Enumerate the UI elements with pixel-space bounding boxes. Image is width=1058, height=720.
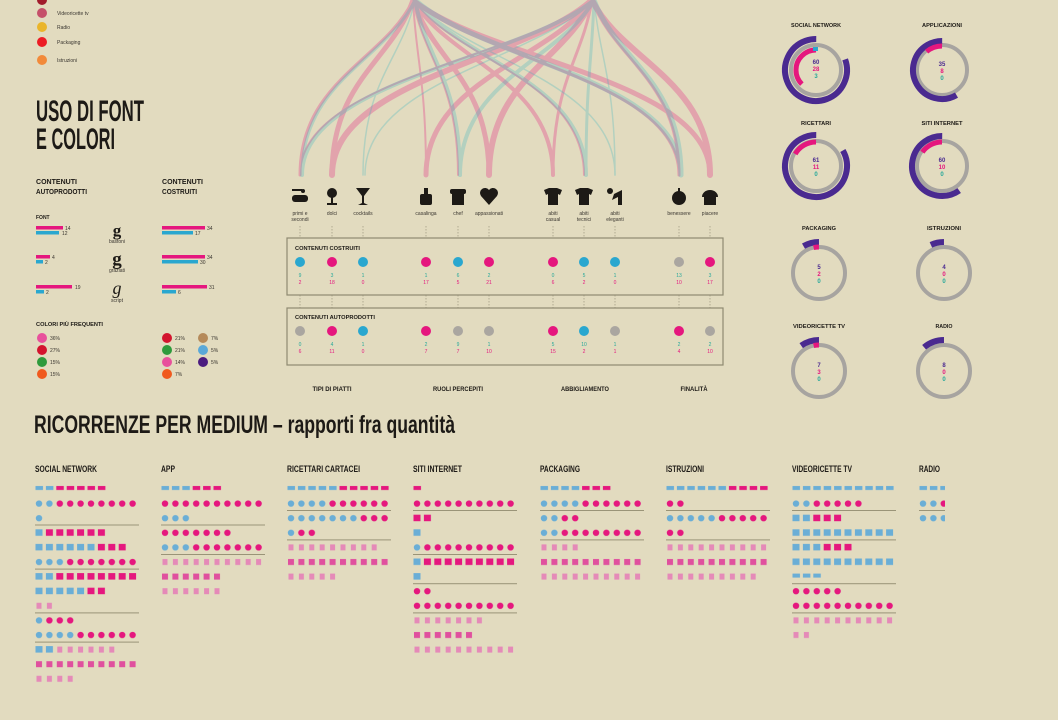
grid column headings: SITI INTERNET xyxy=(413,464,462,474)
font section: contenuti costruiti: 17 xyxy=(195,231,201,237)
donut: applicazioni: 8 xyxy=(940,69,944,75)
donut: applicazioni xyxy=(902,23,982,110)
category labels: casalinga xyxy=(415,211,437,217)
grid column headings: ISTRUZIONI xyxy=(666,464,704,474)
icon grid: radio xyxy=(919,484,945,523)
flow curves xyxy=(300,0,710,175)
icon grid: istruzioni xyxy=(666,484,770,582)
font glyph samples: g xyxy=(112,278,122,298)
panel: contenuti costruiti: 3 xyxy=(331,273,334,279)
grid column headings: APP xyxy=(161,464,175,474)
grid column headings: RADIO xyxy=(919,464,940,474)
colori più frequenti: 5% xyxy=(211,348,219,354)
colori più frequenti: 7% xyxy=(211,336,219,342)
donut: packaging: PACKAGING xyxy=(802,226,836,232)
donut: applicazioni: 0 xyxy=(940,76,944,82)
donut: radio: 0 xyxy=(942,370,946,376)
grid column headings xyxy=(35,464,940,474)
category labels: primi e xyxy=(292,211,308,217)
panel: contenuti autoprodotti: 11 xyxy=(329,349,335,355)
donut: ricettari: 0 xyxy=(814,172,818,178)
font glyph samples: script xyxy=(111,298,124,304)
font section: contenuti autoprodotti: 2 xyxy=(45,260,48,266)
panel: contenuti costruiti: 1 xyxy=(362,273,365,279)
panel: contenuti costruiti: CONTENUTI COSTRUITI xyxy=(295,246,360,252)
donut: videoricette tv: VIDEORICETTE TV xyxy=(793,324,845,330)
legend: Istruzioni xyxy=(57,58,77,64)
category labels: benessere xyxy=(667,211,691,217)
donut: radio: 8 xyxy=(942,363,946,369)
font section: contenuti costruiti: 30 xyxy=(200,260,206,266)
icon grid: packaging xyxy=(540,484,644,582)
panel: contenuti autoprodotti: 10 xyxy=(486,349,492,355)
font section: contenuti autoprodotti: 19 xyxy=(75,285,81,291)
font glyph samples: g xyxy=(112,249,122,270)
panel: contenuti autoprodotti: 9 xyxy=(457,342,460,348)
donut: siti internet: 60 xyxy=(939,158,946,164)
grid column headings: PACKAGING xyxy=(540,464,580,474)
font section: contenuti costruiti: 31 xyxy=(209,285,215,291)
donut: social network: 60 xyxy=(813,60,820,66)
group labels xyxy=(312,386,708,393)
legend xyxy=(37,0,89,65)
panel: contenuti autoprodotti: 10 xyxy=(581,342,587,348)
colori più frequenti: 21% xyxy=(175,348,186,354)
panel: contenuti costruiti: 0 xyxy=(552,273,555,279)
legend: Packaging xyxy=(57,40,81,46)
grid column headings: VIDEORICETTE TV xyxy=(792,464,852,474)
donut: radio: 0 xyxy=(942,377,946,383)
panel: contenuti autoprodotti: CONTENUTI AUTOPRODOTTI xyxy=(295,315,375,321)
colori più frequenti: 7% xyxy=(175,372,183,378)
icon grid: videoricette tv xyxy=(792,484,896,640)
font section: contenuti costruiti: 34 xyxy=(207,255,213,261)
panel: contenuti autoprodotti: 4 xyxy=(331,342,334,348)
panel: contenuti costruiti: 5 xyxy=(457,280,460,286)
group labels: ABBIGLIAMENTO xyxy=(561,387,609,393)
panel: contenuti autoprodotti: 6 xyxy=(299,349,302,355)
font section: contenuti autoprodotti: 14 xyxy=(65,226,71,232)
category labels: chef xyxy=(453,211,463,217)
donut: social network: 28 xyxy=(813,67,820,73)
colori più frequenti: 27% xyxy=(50,348,61,354)
category labels: secondi xyxy=(291,217,309,223)
font section: contenuti autoprodotti: 2 xyxy=(46,290,49,296)
panel: contenuti costruiti: 17 xyxy=(707,280,713,286)
font section: contenuti costruiti: COSTRUITI xyxy=(162,187,197,196)
icon grid: social network xyxy=(35,484,139,684)
donut charts xyxy=(774,23,988,415)
colori più frequenti xyxy=(36,321,219,379)
group labels: FINALITÀ xyxy=(680,386,708,393)
donut: istruzioni: 0 xyxy=(942,272,946,278)
colori più frequenti: 14% xyxy=(175,360,186,366)
font section: contenuti costruiti: 6 xyxy=(178,290,181,296)
donut: ricettari: RICETTARI xyxy=(801,121,831,127)
donut: ricettari xyxy=(774,121,858,208)
panel: contenuti costruiti: 1 xyxy=(614,273,617,279)
donut: istruzioni: 4 xyxy=(942,265,946,271)
category labels: tecnici xyxy=(577,217,591,223)
panel: contenuti autoprodotti: 2 xyxy=(425,342,428,348)
donut: ricettari: 61 xyxy=(813,158,820,164)
title: uso di font e colori: USO DI FONT xyxy=(36,95,144,128)
font glyph samples: bastoni xyxy=(109,239,125,245)
panel: contenuti costruiti: 18 xyxy=(329,280,335,286)
panel: contenuti costruiti: 5 xyxy=(583,273,586,279)
colori più frequenti: 15% xyxy=(50,372,61,378)
panel: contenuti autoprodotti: 2 xyxy=(678,342,681,348)
panel: contenuti costruiti: 17 xyxy=(423,280,429,286)
category labels: abiti xyxy=(548,211,558,217)
font section: contenuti autoprodotti: AUTOPRODOTTI xyxy=(36,187,87,196)
panel: contenuti autoprodotti: 5 xyxy=(552,342,555,348)
colori più frequenti: 21% xyxy=(175,336,186,342)
donut: videoricette tv: 3 xyxy=(817,370,821,376)
panel: contenuti autoprodotti: 10 xyxy=(707,349,713,355)
panel: contenuti costruiti: 1 xyxy=(425,273,428,279)
category icons xyxy=(292,188,718,205)
category labels: abiti xyxy=(610,211,620,217)
panel: contenuti costruiti: 9 xyxy=(299,273,302,279)
font section: contenuti costruiti: 34 xyxy=(207,226,213,232)
panel: contenuti autoprodotti: 4 xyxy=(678,349,681,355)
category labels: piacere xyxy=(702,211,718,217)
font glyph samples: graziati xyxy=(109,268,125,274)
donut: istruzioni: 0 xyxy=(942,279,946,285)
panel: contenuti costruiti: 0 xyxy=(614,280,617,286)
category labels: abiti xyxy=(579,211,589,217)
donut: videoricette tv: 0 xyxy=(817,377,821,383)
donut: social network: 3 xyxy=(814,74,818,80)
donut: istruzioni: ISTRUZIONI xyxy=(927,226,962,232)
donut: videoricette tv: 7 xyxy=(817,363,821,369)
panel: contenuti autoprodotti: 7 xyxy=(425,349,428,355)
panel: contenuti costruiti: 10 xyxy=(676,280,682,286)
category labels: dolci xyxy=(327,211,337,217)
icon grid: siti internet xyxy=(413,484,517,655)
legend: Radio xyxy=(57,25,70,31)
panel: contenuti costruiti: 2 xyxy=(488,273,491,279)
category labels: appassionati xyxy=(475,211,503,217)
panel: contenuti autoprodotti: 0 xyxy=(299,342,302,348)
panel: contenuti autoprodotti: 1 xyxy=(362,342,365,348)
panel: contenuti costruiti: 3 xyxy=(709,273,712,279)
panel: contenuti autoprodotti: 0 xyxy=(362,349,365,355)
panel: contenuti costruiti: 21 xyxy=(486,280,492,286)
donut: ricettari: 11 xyxy=(813,165,820,171)
font section: contenuti autoprodotti: 4 xyxy=(52,255,55,261)
donut: social network: SOCIAL NETWORK xyxy=(791,23,841,29)
icon grid: app xyxy=(161,484,265,596)
title: uso di font e colori: E COLORI xyxy=(36,123,115,156)
font section: contenuti costruiti xyxy=(162,177,215,296)
dashed connectors xyxy=(300,226,710,308)
font glyph samples xyxy=(109,221,125,304)
panel: contenuti autoprodotti: 15 xyxy=(550,349,556,355)
donut: videoricette tv xyxy=(776,324,862,414)
grid column headings: SOCIAL NETWORK xyxy=(35,464,97,474)
title: uso di font e colori xyxy=(36,95,144,156)
donut: siti internet: 0 xyxy=(940,172,944,178)
donut: radio xyxy=(900,324,988,415)
panel: contenuti autoprodotti: 1 xyxy=(488,342,491,348)
colori più frequenti: COLORI PIÙ FREQUENTI xyxy=(36,321,103,328)
panel: contenuti costruiti: 6 xyxy=(552,280,555,286)
font glyph samples: g xyxy=(113,221,122,240)
font section: contenuti autoprodotti: CONTENUTI xyxy=(36,177,77,186)
donut: packaging: 0 xyxy=(817,279,821,285)
legend: Videoricette tv xyxy=(57,11,89,17)
panel: contenuti costruiti: 13 xyxy=(676,273,682,279)
category labels: casual xyxy=(546,217,560,223)
panel: contenuti autoprodotti: 7 xyxy=(457,349,460,355)
panel: contenuti costruiti: 2 xyxy=(583,280,586,286)
group labels: TIPI DI PIATTI xyxy=(312,387,352,393)
donut: siti internet: SITI INTERNET xyxy=(922,121,963,127)
donut: siti internet xyxy=(900,121,984,208)
panel: contenuti autoprodotti: 1 xyxy=(614,349,617,355)
panel: contenuti autoprodotti: 1 xyxy=(614,342,617,348)
panel: contenuti costruiti: 0 xyxy=(362,280,365,286)
group labels: RUOLI PERCEPITI xyxy=(433,387,483,393)
donut: social network xyxy=(776,23,856,110)
panel: contenuti autoprodotti xyxy=(287,308,723,365)
donut: packaging: 5 xyxy=(817,265,821,271)
grid column headings: RICETTARI CARTACEI xyxy=(287,464,360,474)
font section: contenuti autoprodotti: 12 xyxy=(62,231,68,237)
donut: packaging: 2 xyxy=(817,272,821,278)
donut: applicazioni: APPLICAZIONI xyxy=(922,23,962,29)
icon grid: ricettari cartacei xyxy=(287,484,391,582)
heading: ricorrenze per medium: RICORRENZE PER MEDIUM – rapporti fra quantità xyxy=(34,411,455,439)
panel: contenuti autoprodotti: 2 xyxy=(583,349,586,355)
category labels xyxy=(291,211,718,223)
panel: contenuti costruiti: 2 xyxy=(299,280,302,286)
panel: contenuti autoprodotti: 2 xyxy=(709,342,712,348)
panel: contenuti costruiti: 6 xyxy=(457,273,460,279)
donut: packaging xyxy=(777,226,861,315)
panel: contenuti costruiti xyxy=(287,238,723,295)
donut: applicazioni: 35 xyxy=(939,62,946,68)
category labels: cocktails xyxy=(353,211,373,217)
font section: contenuti autoprodotti: FONT xyxy=(36,215,50,221)
colori più frequenti: 15% xyxy=(50,360,61,366)
colori più frequenti: 36% xyxy=(50,336,61,342)
donut: istruzioni xyxy=(903,226,985,314)
font section: contenuti costruiti: CONTENUTI xyxy=(162,177,203,186)
donut: radio: RADIO xyxy=(936,324,953,330)
donut: siti internet: 10 xyxy=(939,165,946,171)
category labels: eleganti xyxy=(606,217,624,223)
font section: contenuti autoprodotti xyxy=(36,177,87,296)
colori più frequenti: 5% xyxy=(211,360,219,366)
